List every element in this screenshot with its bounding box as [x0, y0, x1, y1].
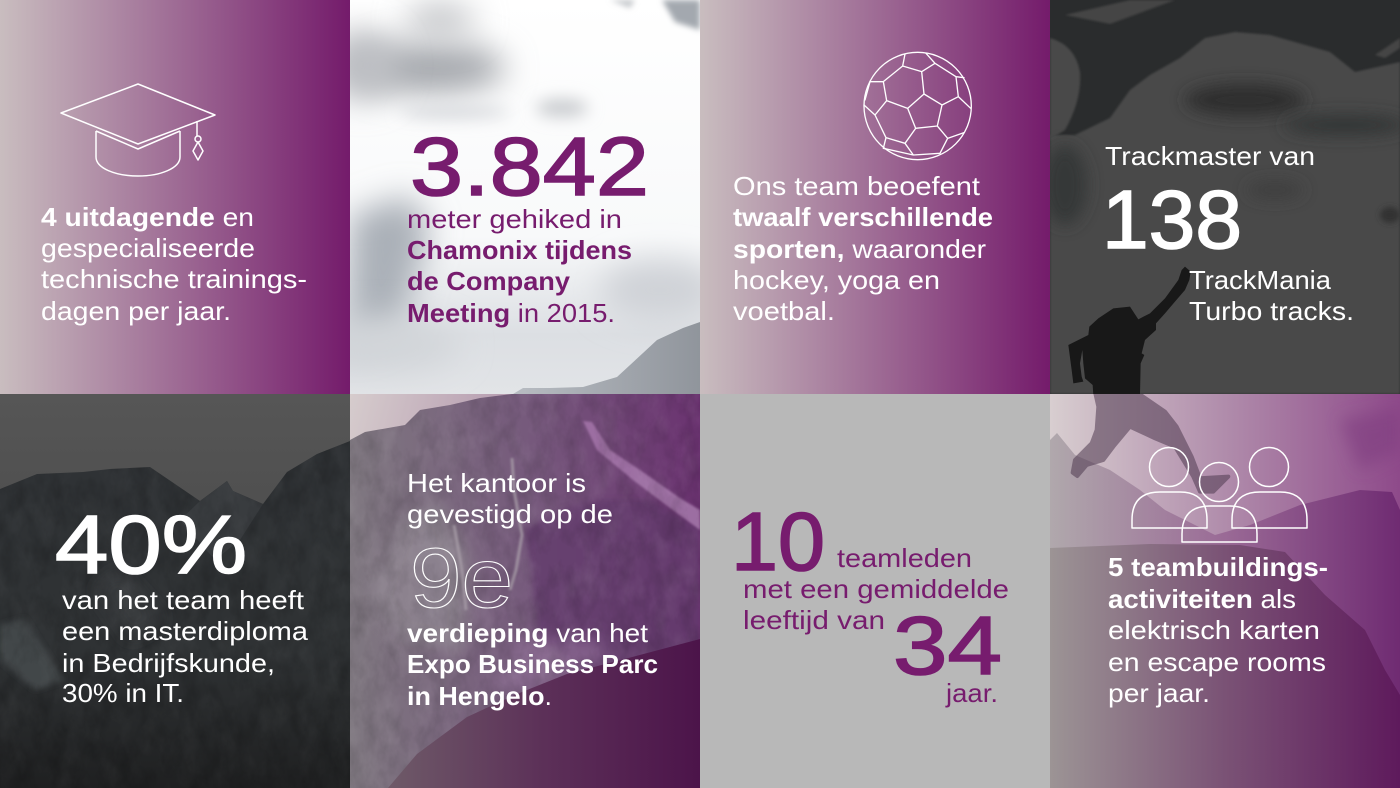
text: hike: Chamonix tijdens — [407, 235, 632, 265]
text: hike — [407, 204, 632, 328]
figure: 3.842: 3.842 — [410, 120, 649, 213]
figure: 9e outline: 9e — [410, 531, 513, 625]
figure: 34: 34 — [893, 599, 1002, 692]
mountain backdrop — [1050, 408, 1400, 788]
panel: office — [350, 394, 700, 788]
text: masters degree: van het team heeft — [62, 585, 305, 615]
panel: Chamonix hike — [350, 0, 700, 394]
icon: football — [864, 52, 971, 160]
figure: 40%: 40% — [55, 498, 247, 591]
text: sports: Ons team beoefent — [733, 171, 981, 201]
text: masters degree: in Bedrijfskunde, — [62, 648, 275, 678]
text: sports: hockey, yoga en — [733, 265, 940, 295]
text: sports: voetbal. — [733, 296, 835, 326]
text: sports: sporten, waaronder — [733, 234, 986, 264]
text: floor and address: verdieping van het — [407, 618, 649, 648]
text: masters degree — [62, 585, 309, 708]
figure: 138: 138 — [1102, 173, 1242, 266]
text: floor and address — [407, 618, 658, 711]
text: teambuilding: 5 teambuildings- — [1108, 552, 1328, 582]
text: teamleden: met een gemiddelde — [743, 574, 1009, 604]
text: teambuilding: activiteiten als — [1108, 584, 1296, 614]
text: training days: dagen per jaar. — [41, 296, 231, 326]
silhouette: climber upper body — [1068, 267, 1191, 395]
text: floor and address: Expo Business Parc — [407, 649, 658, 679]
text: teamleden: leeftijd van — [743, 605, 885, 635]
mountain backdrop — [350, 394, 700, 788]
text: masters degree: een masterdiploma — [62, 616, 309, 646]
panel: training days — [0, 0, 350, 394]
text: teambuilding: elektrisch karten — [1108, 615, 1320, 645]
panel: teambuilding — [1050, 393, 1400, 788]
panel: sports — [700, 0, 1050, 394]
text: training days: gespecialiseerde — [41, 233, 255, 263]
text: jaar: jaar. — [945, 678, 998, 708]
text: office location: Het kantoor is — [407, 468, 586, 498]
text: teamleden: teamleden — [837, 543, 972, 573]
text: TrackMania tracks: Turbo tracks. — [1189, 296, 1354, 326]
text: hike: Meeting in 2015. — [407, 298, 615, 328]
text: training days: technische trainings- — [41, 264, 307, 294]
text: teambuilding: en escape rooms — [1108, 647, 1326, 677]
text: teamleden — [743, 543, 1009, 635]
figure: 10: 10 — [731, 495, 825, 588]
text: training days — [41, 202, 307, 326]
text: Trackmaster intro: Trackmaster van — [1105, 141, 1315, 171]
text: teambuilding: per jaar. — [1108, 678, 1210, 708]
text: TrackMania tracks: TrackMania — [1189, 265, 1332, 295]
text: hike: meter gehiked in — [407, 204, 622, 234]
text: floor and address: in Hengelo. — [407, 681, 552, 711]
icon: three people — [1132, 448, 1307, 542]
text: hike: de Company — [407, 266, 571, 296]
clouds and mountain backdrop — [300, 0, 720, 394]
text: office location: gevestigd op de — [407, 499, 613, 529]
panel: masters degree — [0, 394, 350, 788]
text: office location — [407, 468, 613, 529]
icon: graduation cap — [61, 84, 215, 176]
mountain backdrop — [0, 441, 350, 788]
text: sports: twaalf verschillende — [733, 202, 993, 232]
text: teambuilding — [1108, 552, 1328, 708]
panel: TrackMania — [1043, 0, 1400, 395]
panel: team members — [700, 394, 1050, 788]
silhouette: climber legs — [1073, 393, 1228, 492]
text: masters degree: 30% in IT. — [62, 678, 184, 708]
text: training days: 4 uitdagende en — [41, 202, 254, 232]
text: TrackMania tracks — [1190, 270, 1352, 320]
text: sports — [733, 171, 993, 326]
cloud backdrop — [1043, 0, 1400, 394]
